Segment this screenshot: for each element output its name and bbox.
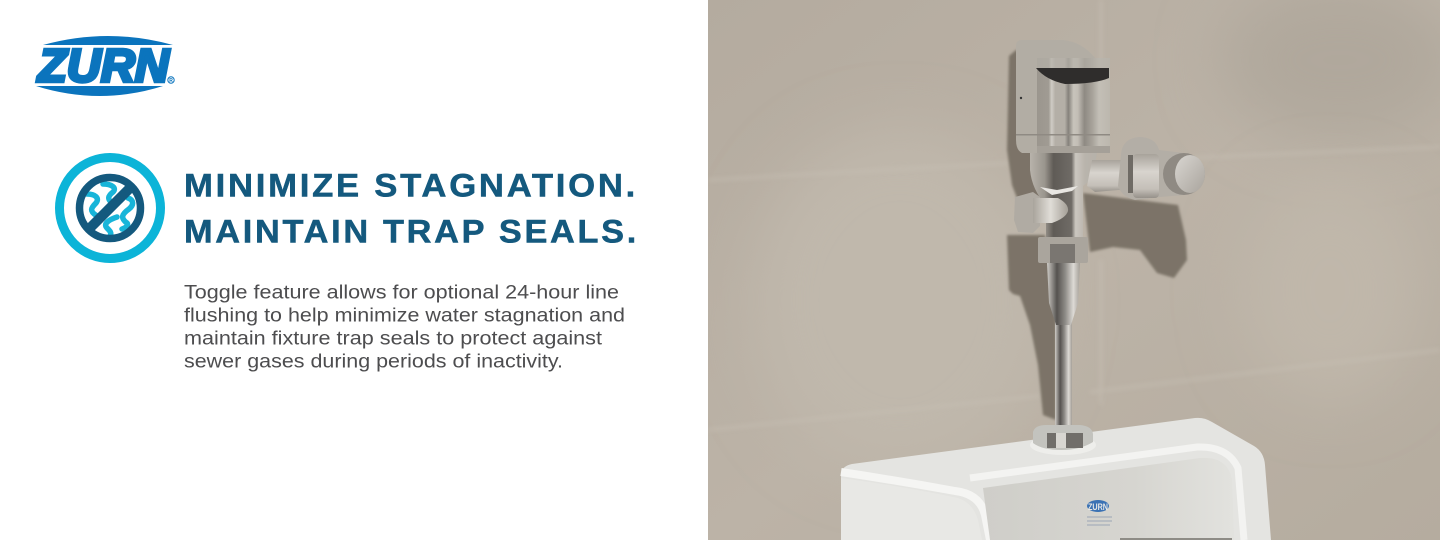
panel: product photo: [708, 0, 1440, 540]
collar nut: [1038, 237, 1088, 263]
urinal: [841, 418, 1271, 540]
heading: [184, 168, 639, 250]
prohibition sign: [80, 178, 140, 238]
sensor window: [1036, 68, 1109, 84]
outer ring: [60, 158, 160, 258]
waves: [87, 184, 133, 236]
urinal logo: [1087, 500, 1112, 525]
valve body: [1030, 153, 1097, 240]
tile joints: [708, 0, 1440, 430]
body text: sewer gases during periods of inactivity.: [184, 352, 563, 372]
urinal logo: ZURN: [1088, 502, 1108, 512]
icon: no stagnant water: [55, 153, 165, 263]
body text: flushing to help minimize water stagnation and: [184, 306, 625, 326]
heading: MAINTAIN TRAP SEALS.: [184, 214, 639, 250]
body text: Toggle feature allows for optional 24-hour line: [184, 282, 619, 304]
registered mark: [168, 77, 174, 84]
logo: Zurn: [34, 36, 175, 96]
registered mark: R: [169, 78, 173, 84]
stop handle: [1014, 186, 1078, 233]
logo wordmark: ZURN: [36, 40, 170, 92]
flush pipe: [1055, 322, 1072, 428]
sensor head: [1016, 40, 1110, 153]
body text: [184, 282, 625, 372]
floor flange: [1030, 425, 1096, 455]
body text: maintain fixture trap seals to protect against: [184, 328, 603, 350]
side arm: [1087, 137, 1205, 200]
logo bottom arc: [36, 86, 163, 96]
heading: MINIMIZE STAGNATION.: [184, 168, 638, 204]
logo top arc: [43, 36, 173, 45]
flush valve: [1014, 40, 1205, 455]
wall shadow of valve: [1007, 50, 1187, 420]
